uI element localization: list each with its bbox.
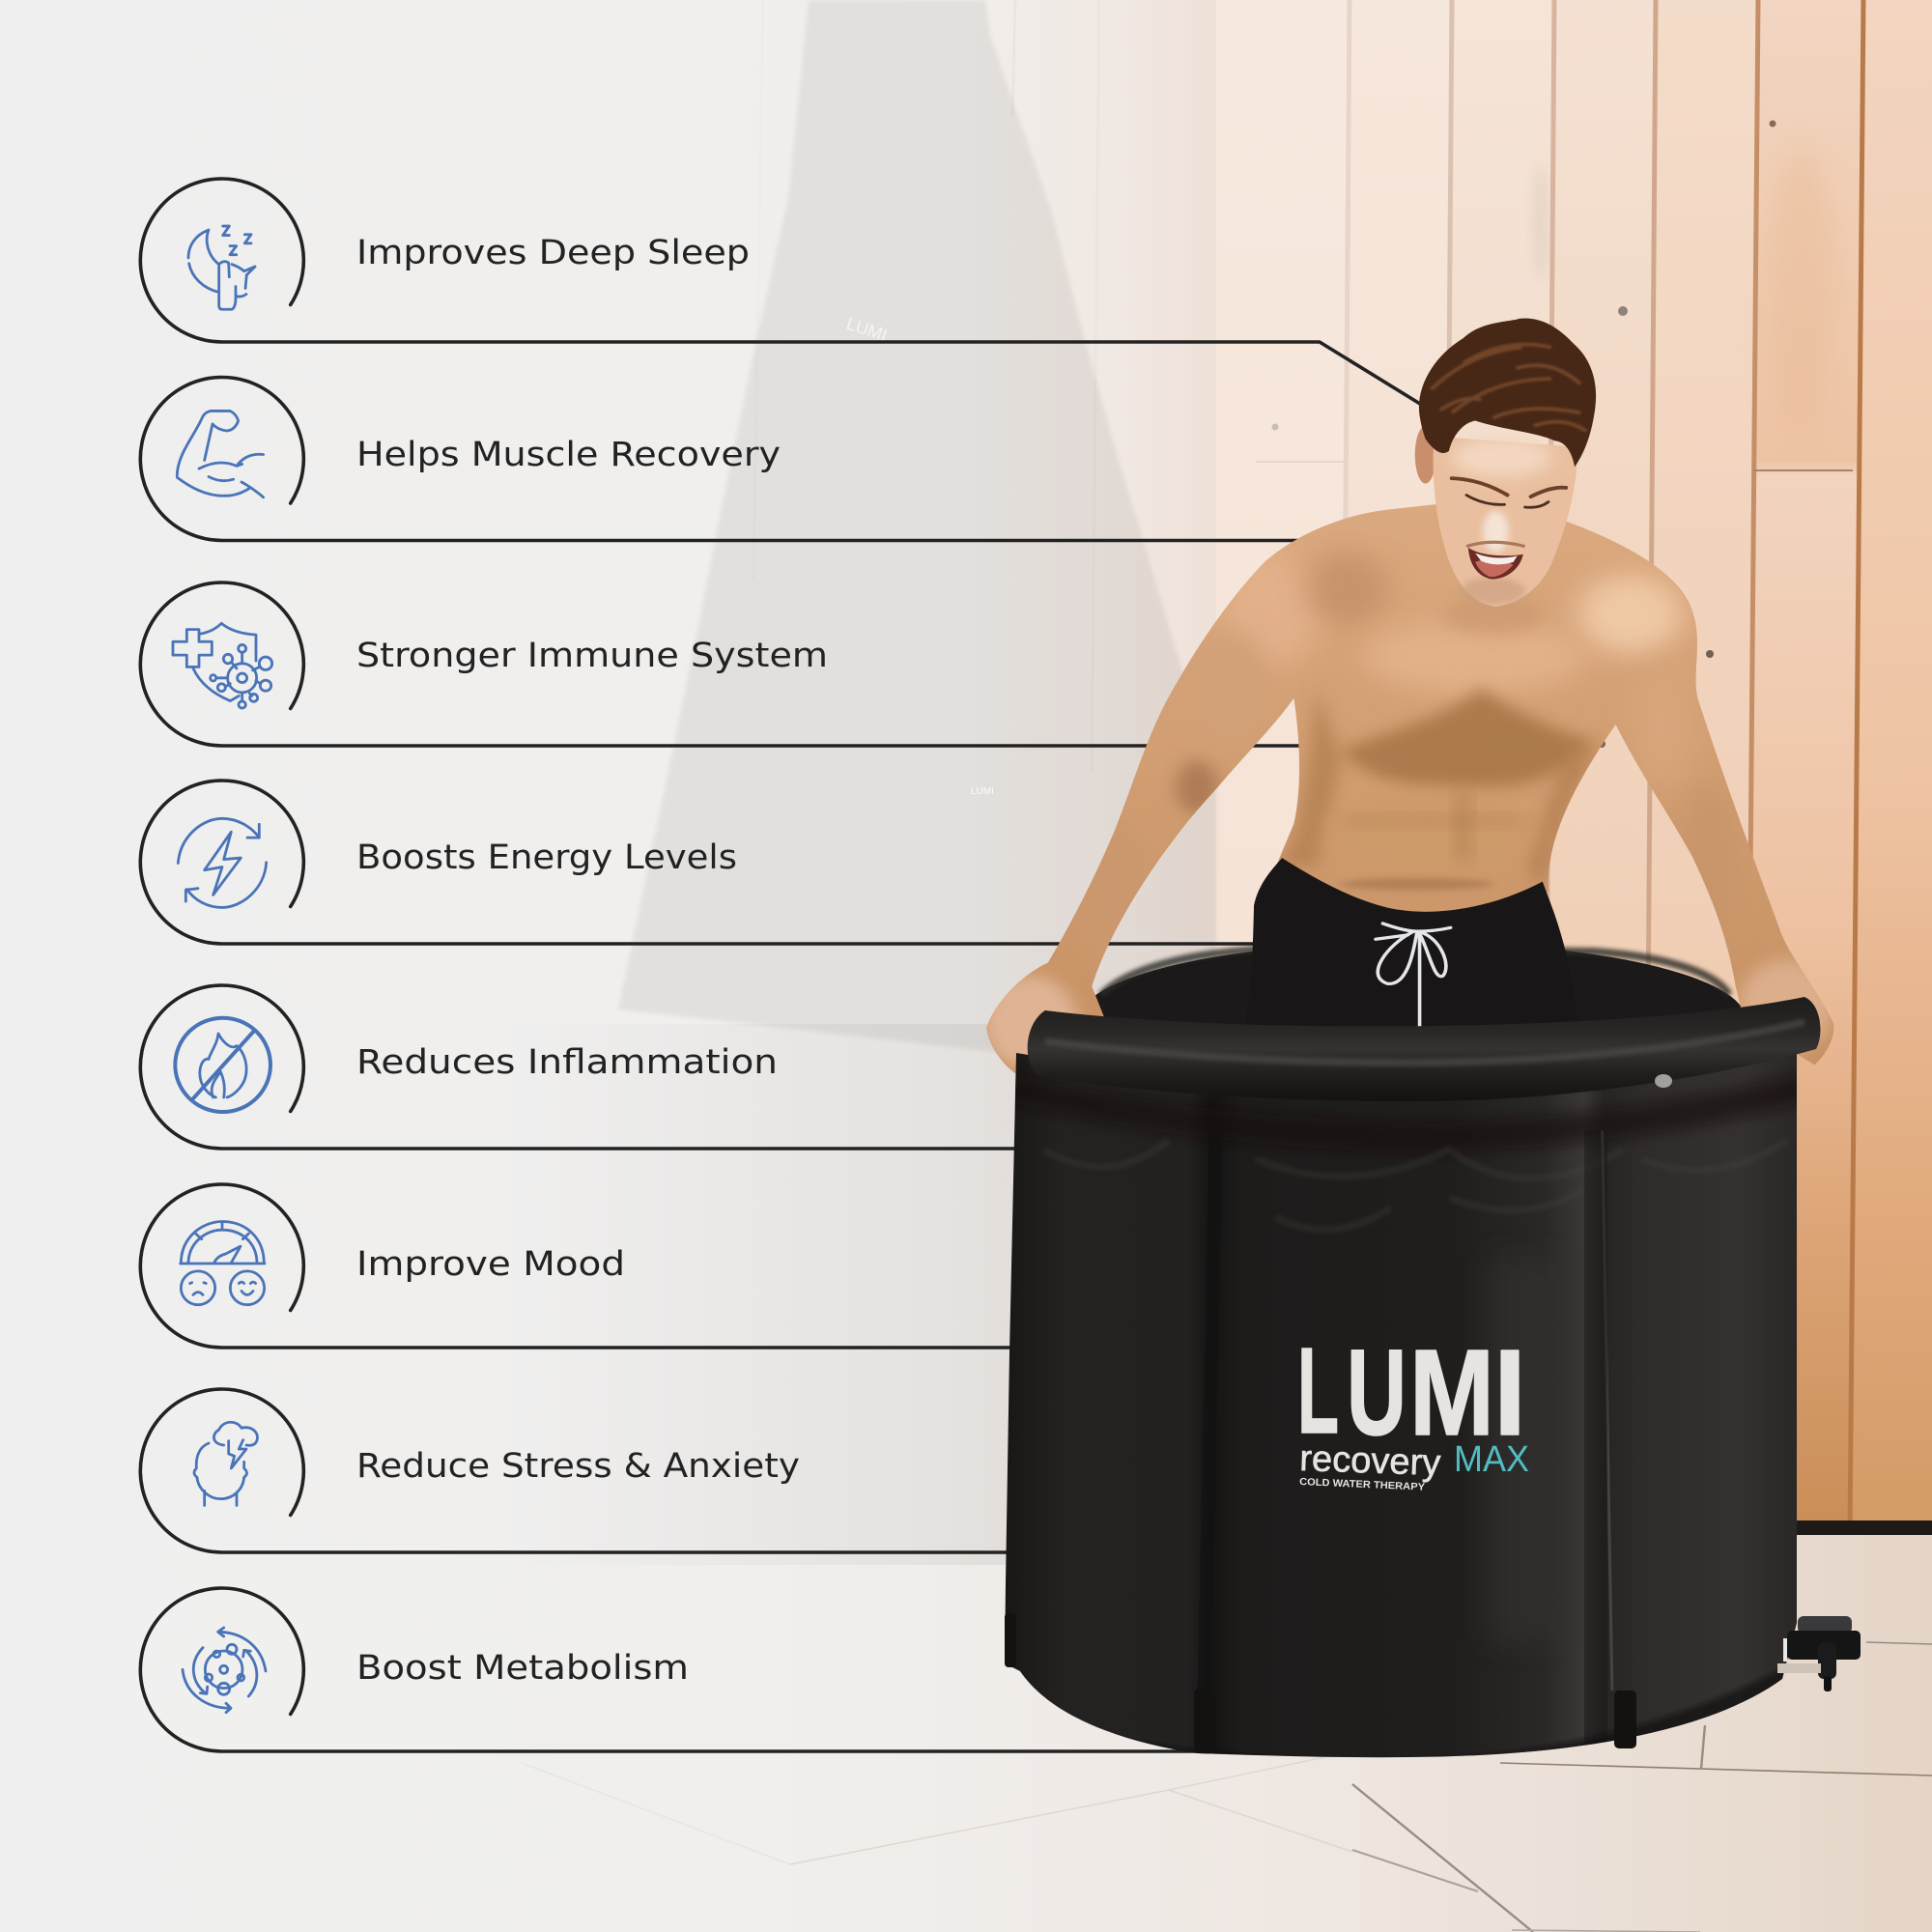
tub body [1005,1043,1806,1768]
icon: metabolism cycle [183,1628,266,1713]
label: Stronger Immune System [356,637,828,675]
brand logo on tub: L [1297,1322,1339,1459]
icon: crossed-out flame [175,1018,270,1112]
label: Reduces Inflammation [356,1043,778,1082]
baseboard [1739,1520,1932,1535]
ice bath tub interior and back rim [1079,942,1746,1096]
ear [1415,426,1436,484]
hair [1419,318,1596,467]
label: Improves Deep Sleep [356,234,750,272]
brand logo on tub [1297,1322,1529,1493]
brand logo on tub: I [1493,1324,1526,1461]
swim shorts [1244,858,1577,1031]
callout: Reduce Stress & Anxiety [140,1389,1063,1552]
outline [140,1389,1063,1552]
callout: Boost Metabolism [140,1588,1256,1751]
icon: energy bolt in arrows [178,818,267,907]
outline with leader line [140,179,1420,404]
icon: flexed arm [177,411,264,497]
pale fade overlay over left side [0,0,1216,1546]
drain tap [1777,1616,1861,1691]
outline [140,985,1063,1149]
ice bath tub [1005,997,1861,1768]
ghost plank lines [753,0,1099,773]
label: Reduce Stress & Anxiety [356,1447,800,1486]
ghost tub silhouette: LUMI [971,786,994,797]
label: Boost Metabolism [356,1649,689,1688]
outline [140,582,1352,746]
callout: Stronger Immune System [140,582,1352,746]
floor [0,1535,1932,1932]
callout: Boosts Energy Levels [140,781,1352,944]
ghost tub silhouette: LUMI [844,314,890,345]
label: Boosts Energy Levels [356,838,737,877]
icon: shield, cross and virus [173,623,272,708]
brand logo on tub: U [1347,1324,1406,1461]
callout: Improves Deep Sleep [140,179,1420,404]
label: Improve Mood [356,1245,625,1284]
outline [140,1184,1063,1348]
brand logo on tub: recovery [1299,1438,1441,1484]
drawstring [1376,923,1451,1026]
outline [140,1588,1256,1751]
label: Helps Muscle Recovery [356,436,781,474]
callout: Reduces Inflammation [140,985,1063,1149]
outline [140,781,1352,944]
icon: mood gauge with faces [181,1221,265,1305]
man in tub [983,318,1833,1077]
brand logo on tub: M [1409,1324,1494,1461]
face [1434,437,1577,607]
front inflatable rim [1028,997,1820,1101]
brand logo on tub: MAX [1454,1439,1529,1480]
outline [140,378,1352,541]
body skin [983,504,1833,1077]
callout: Improve Mood [140,1184,1063,1348]
icon: head with storm cloud [194,1422,257,1505]
wall planks [0,0,1932,1536]
ghost tub silhouette [502,0,1217,1565]
brand logo on tub: COLD WATER THERAPY [1299,1476,1425,1493]
callout: Helps Muscle Recovery [140,378,1352,541]
icon: moon and sleeping hand [188,226,255,309]
tub feet [1194,1689,1215,1752]
